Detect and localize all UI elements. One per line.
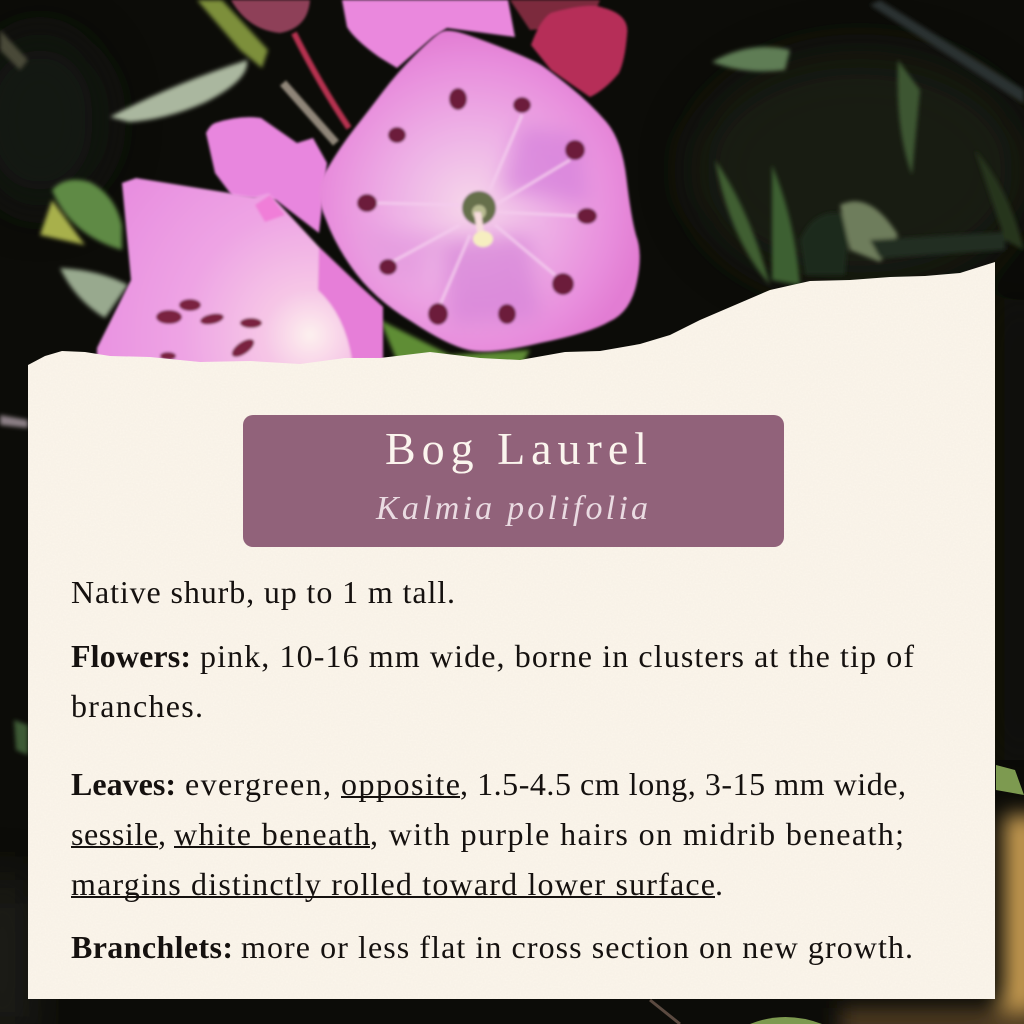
text: flowers <box>71 638 914 724</box>
text: leaves: , with purple hairs on midrib beneath; <box>370 816 904 852</box>
subtitle: scientific name: Kalmia polifolia <box>375 490 648 527</box>
text: leaves <box>71 766 906 902</box>
photo: back flower <box>206 117 327 233</box>
text: leaves: margins distinctly rolled toward lower surface <box>71 866 715 902</box>
text: leaves: evergreen, <box>185 766 331 802</box>
lower right blurred yellow flower <box>840 815 1024 1024</box>
title box <box>243 415 784 547</box>
text: leaves: , 1.5-4.5 cm long, 3-15 mm wide, <box>460 766 906 802</box>
text: leaves: Leaves: <box>71 766 176 802</box>
photo: stems and buds <box>231 0 627 143</box>
text: flowers: pink, 10-16 mm wide, borne in clusters at the tip of <box>200 638 914 674</box>
text: branchlets: more or less flat in cross section on new growth. <box>241 929 913 965</box>
photo: main flower <box>319 31 640 351</box>
text: leaves: opposite <box>341 766 460 802</box>
text: branchlets: Branchlets: <box>71 929 233 965</box>
text: leaves: . <box>715 866 723 902</box>
text: leaves: sessile <box>71 816 158 852</box>
text: habit: Native shurb, up to 1 m tall. <box>71 574 455 610</box>
photo: left flower <box>97 178 383 368</box>
text: leaves: white beneath <box>174 816 370 852</box>
title: common name: Bog Laurel <box>385 423 647 474</box>
text: flowers: Flowers: <box>71 638 191 674</box>
text: flowers: branches. <box>71 688 203 724</box>
photo: top flower <box>342 0 515 68</box>
torn paper panel <box>28 262 995 999</box>
text: leaves: , <box>158 816 166 852</box>
